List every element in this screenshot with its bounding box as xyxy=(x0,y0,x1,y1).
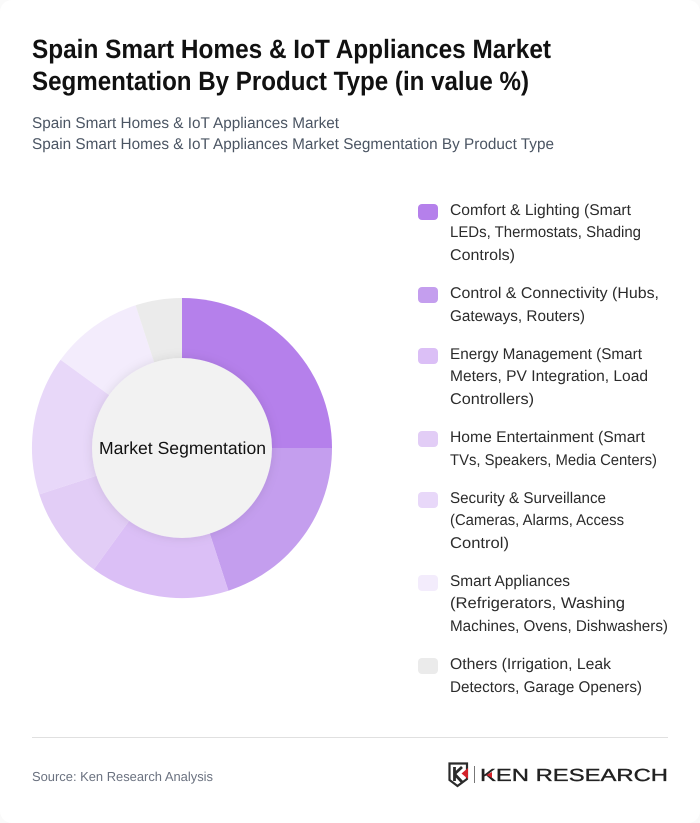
donut chart xyxy=(32,298,332,598)
legend item: Others: Others (Irrigation, Leak xyxy=(450,656,611,673)
legend item: Security & Surveillance: Control) xyxy=(450,535,509,552)
legend xyxy=(418,202,668,696)
subtitle: Spain Smart Homes & IoT Appliances Market xyxy=(32,115,340,132)
legend item: Others xyxy=(418,656,642,696)
title xyxy=(32,34,551,96)
legend item: Smart Appliances: (Refrigerators, Washing xyxy=(450,595,625,612)
legend item: Smart Appliances: Machines, Ovens, Dishwashers) xyxy=(450,618,668,635)
center label: Market Segmentation xyxy=(99,438,266,458)
logo: Ken Research xyxy=(450,764,668,786)
legend item: Comfort & Lighting: LEDs, Thermostats, Shading xyxy=(450,224,641,241)
segment: Control & Connectivity xyxy=(182,448,332,591)
legend item: Comfort & Lighting: Controls) xyxy=(450,247,515,264)
legend item: Home Entertainment: Home Entertainment (Smart xyxy=(450,429,646,446)
center circle xyxy=(92,358,272,538)
title: Spain Smart Homes & IoT Appliances Market xyxy=(32,34,551,64)
segment: Smart Appliances xyxy=(61,305,182,448)
legend item: Smart Appliances xyxy=(418,573,668,635)
legend item: Energy Management: Meters, PV Integration, Load xyxy=(450,368,648,385)
legend item: Security & Surveillance: Security & Surveillance xyxy=(450,490,606,507)
legend item: Home Entertainment xyxy=(418,429,657,469)
legend item: Comfort & Lighting xyxy=(418,202,641,264)
segment: Home Entertainment xyxy=(39,448,182,569)
segment: Security & Surveillance xyxy=(32,360,182,494)
legend item: Energy Management: Controllers) xyxy=(450,391,534,408)
icon: shield xyxy=(450,764,468,786)
legend item: Security & Surveillance: (Cameras, Alarms, Access xyxy=(450,512,624,529)
wordmark: KEN RESEARCH xyxy=(480,765,668,785)
legend item: Security & Surveillance xyxy=(418,490,624,552)
legend item: Control & Connectivity xyxy=(418,285,659,325)
legend item: Energy Management: Energy Management (Smart xyxy=(450,346,643,363)
legend item: Others: Detectors, Garage Openers) xyxy=(450,679,642,696)
subtitle xyxy=(32,115,554,153)
legend item: Comfort & Lighting: Comfort & Lighting (Smart xyxy=(450,202,632,219)
legend item: Control & Connectivity: Control & Connectivity (Hubs, xyxy=(450,285,659,302)
legend item: Energy Management xyxy=(418,346,648,408)
title: Segmentation By Product Type (in value %) xyxy=(32,66,529,96)
legend item: Home Entertainment: TVs, Speakers, Media Centers) xyxy=(450,452,657,469)
legend item: Smart Appliances: Smart Appliances xyxy=(450,573,570,590)
segment: Energy Management xyxy=(94,448,228,598)
segment: Others xyxy=(136,298,182,448)
legend item: Control & Connectivity: Gateways, Routers) xyxy=(450,308,585,325)
source note: Source: Ken Research Analysis xyxy=(32,769,213,784)
subtitle: Spain Smart Homes & IoT Appliances Market Segmentation By Product Type xyxy=(32,136,554,153)
segment: Comfort & Lighting xyxy=(182,298,332,448)
